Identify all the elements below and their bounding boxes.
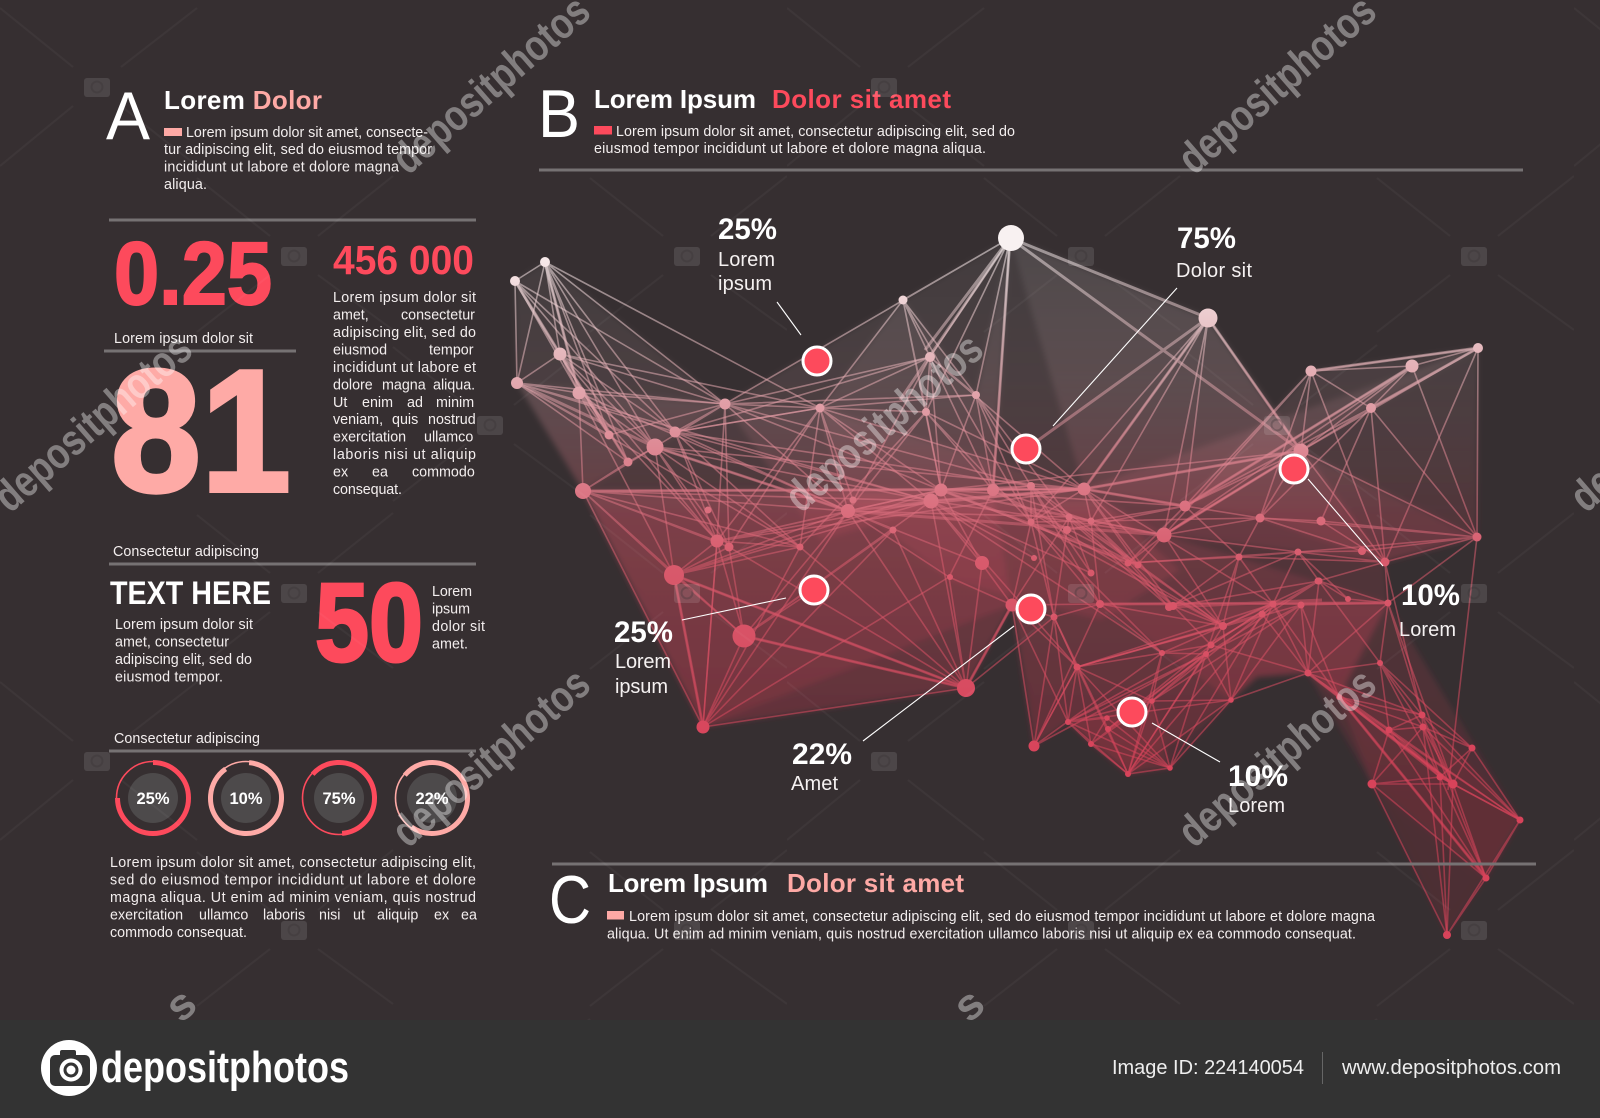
network chart (510, 225, 1524, 939)
network fills (515, 238, 1520, 935)
stat 50 caption: dolor sit (432, 619, 485, 635)
bullet bar C (607, 911, 624, 920)
footer bar (0, 1020, 1600, 1118)
callout 75% (1176, 222, 1252, 282)
network edges (515, 238, 1520, 935)
text column: tempor (429, 342, 474, 358)
letter B: B (538, 76, 580, 152)
bullet bar A (164, 128, 182, 136)
callout 22%: Amet (791, 773, 838, 795)
callout 10% right (1399, 579, 1460, 641)
text block: Lorem ipsum dolor sit (115, 617, 253, 633)
stat 50: 50 (315, 561, 423, 685)
text column: ea (372, 465, 388, 481)
text column: dolore (333, 377, 373, 393)
text column: eiusmod (333, 342, 387, 358)
text column: veniam, (333, 412, 383, 428)
paragraph: nisi (319, 907, 340, 923)
text column: amet, (333, 308, 369, 324)
donut 22% (382, 748, 482, 848)
logo wordmark: depositphotos (101, 1043, 349, 1092)
stat 456 000: 456 000 (333, 237, 474, 283)
panel A: intro (106, 78, 432, 193)
heading B accent: Dolor sit amet (772, 84, 951, 114)
network nodes (510, 225, 1524, 939)
panel B: header (538, 76, 1015, 157)
highlighted markers (800, 347, 1308, 726)
donut 75%: 75% (322, 790, 356, 808)
text block (115, 617, 253, 686)
callout 25% top: ipsum (718, 273, 772, 295)
network thick edges (515, 238, 1486, 878)
callout 75%: Dolor sit (1176, 260, 1252, 282)
watermark text: depositphotos (1168, 659, 1385, 857)
stat 50 caption: ipsum (432, 602, 470, 618)
website: www.depositphotos.com (1341, 1057, 1561, 1079)
watermark text: depositphotos (775, 324, 992, 522)
paragraph: magna aliqua. Ut enim ad minim veniam, quis nostrud (110, 890, 476, 906)
callout 22% (791, 738, 852, 795)
callout 25% left: Lorem (615, 651, 671, 673)
heading C accent: Dolor sit amet (787, 868, 964, 898)
callout 25% left: ipsum (615, 676, 668, 698)
stat 50 caption: amet. (432, 636, 468, 652)
text block A: tur adipiscing elit, sed do eiusmod tempor (164, 142, 432, 158)
text column: commodo (412, 465, 475, 481)
callout 10% right: 10% (1401, 579, 1460, 612)
watermark text: s (155, 979, 206, 1032)
text block A: aliqua. (164, 177, 207, 193)
stat caption: Lorem ipsum dolor sit (114, 331, 253, 347)
paragraph: ut (353, 907, 365, 923)
panel: big numbers (104, 223, 476, 528)
text block A: Lorem ipsum dolor sit amet, consecte- (186, 125, 428, 141)
text column: enim (362, 395, 393, 411)
text column: nostrud (428, 412, 476, 428)
bullet bar B (594, 126, 612, 134)
stat 81: 81 (111, 333, 291, 528)
section label: Consectetur adipiscing (114, 731, 260, 747)
donut 75% (289, 748, 389, 848)
text block A (164, 125, 432, 193)
heading B: Lorem Ipsum (594, 84, 756, 114)
text column: consequat. (333, 482, 402, 498)
donut 22%: 22% (415, 790, 449, 808)
text column: Lorem ipsum dolor sit (333, 290, 476, 306)
donut 10% (208, 760, 284, 836)
stat 50 caption (432, 584, 485, 652)
callout 22%: 22% (792, 738, 852, 771)
text column: consectetur (401, 308, 475, 324)
panel C: footer text (549, 862, 1375, 942)
text column: exercitation (333, 430, 406, 446)
text column: minim (436, 395, 474, 411)
panel: text here (109, 544, 485, 686)
icon: camera logo (41, 1040, 97, 1096)
paragraph: commodo consequat. (110, 925, 247, 941)
letter C: C (549, 862, 591, 938)
text block C: aliqua. Ut enim ad minim veniam, quis nostrud exercitation ullamco laboris nisi ut aliquip ex ea commodo consequat. (607, 926, 1356, 942)
text block C: Lorem ipsum dolor sit amet, consectetur adipiscing elit, sed do eiusmod tempor incididunt ut labore et dolore magna (629, 909, 1375, 925)
paragraph: aliquip (377, 907, 418, 923)
paragraph: Lorem ipsum dolor sit amet, consectetur adipiscing elit, (110, 855, 476, 871)
text block: adipiscing elit, sed do (115, 652, 252, 668)
text block B: Lorem ipsum dolor sit amet, consectetur adipiscing elit, sed do (616, 124, 1015, 140)
text column: aliqua. (433, 377, 475, 393)
stat 50 caption: Lorem (432, 584, 472, 600)
text column (333, 290, 476, 498)
stat 0.25: 0.25 (114, 223, 272, 323)
text column: quis (392, 412, 418, 428)
text column: ad (407, 395, 423, 411)
paragraph: ea (461, 907, 477, 923)
text block B (594, 124, 1015, 157)
title TEXT HERE: TEXT HERE (110, 575, 271, 611)
heading C: Lorem Ipsum (608, 868, 768, 898)
text block A: incididunt ut labore et dolore magna (164, 160, 399, 176)
paragraph: ex (434, 907, 449, 923)
donut 10%: 10% (229, 790, 263, 808)
callout 10% right: Lorem (1399, 619, 1456, 641)
text block B: eiusmod tempor incididunt ut labore et dolore magna aliqua. (594, 141, 986, 157)
text column: incididunt ut labore et (333, 360, 476, 376)
image id: Image ID: 224140054 (1112, 1057, 1304, 1079)
donut 25%: 25% (136, 790, 170, 808)
callout 25% top: 25% (718, 213, 777, 246)
paragraph: ullamco (199, 907, 248, 923)
text block C (607, 909, 1375, 942)
callout 10% bottom: Lorem (1228, 795, 1285, 817)
callout 10% bottom: 10% (1228, 760, 1288, 793)
text column: magna (382, 377, 426, 393)
panel: donut charts (109, 731, 482, 941)
paragraph (110, 855, 477, 941)
text column: Ut (333, 395, 347, 411)
callout 25% left: 25% (614, 616, 673, 649)
text block: amet, consectetur (115, 634, 229, 650)
donut 25% (116, 762, 190, 834)
callout 75%: 75% (1177, 222, 1236, 255)
section label: Consectetur adipiscing (113, 544, 259, 560)
text column: adipiscing elit, sed do (333, 325, 476, 341)
callout 25% top (718, 213, 777, 295)
paragraph: exercitation (110, 907, 183, 923)
callout 25% top: Lorem (718, 249, 775, 271)
callout 25% left (614, 616, 673, 698)
paragraph: sed do eiusmod tempor incididunt ut labore et dolore (110, 872, 476, 888)
callout leader lines (682, 288, 1383, 762)
text column: ullamco (424, 430, 473, 446)
callout 10% bottom (1228, 760, 1288, 817)
paragraph: laboris (263, 907, 305, 923)
text block: eiusmod tempor. (115, 670, 223, 686)
heading A: Lorem Dolor (164, 85, 322, 115)
watermark text: s (943, 979, 994, 1032)
letter A: A (106, 78, 151, 154)
text column: ex (333, 465, 348, 481)
text column: laboris nisi ut aliquip (333, 447, 476, 463)
watermark text: depositphotos (382, 659, 599, 857)
